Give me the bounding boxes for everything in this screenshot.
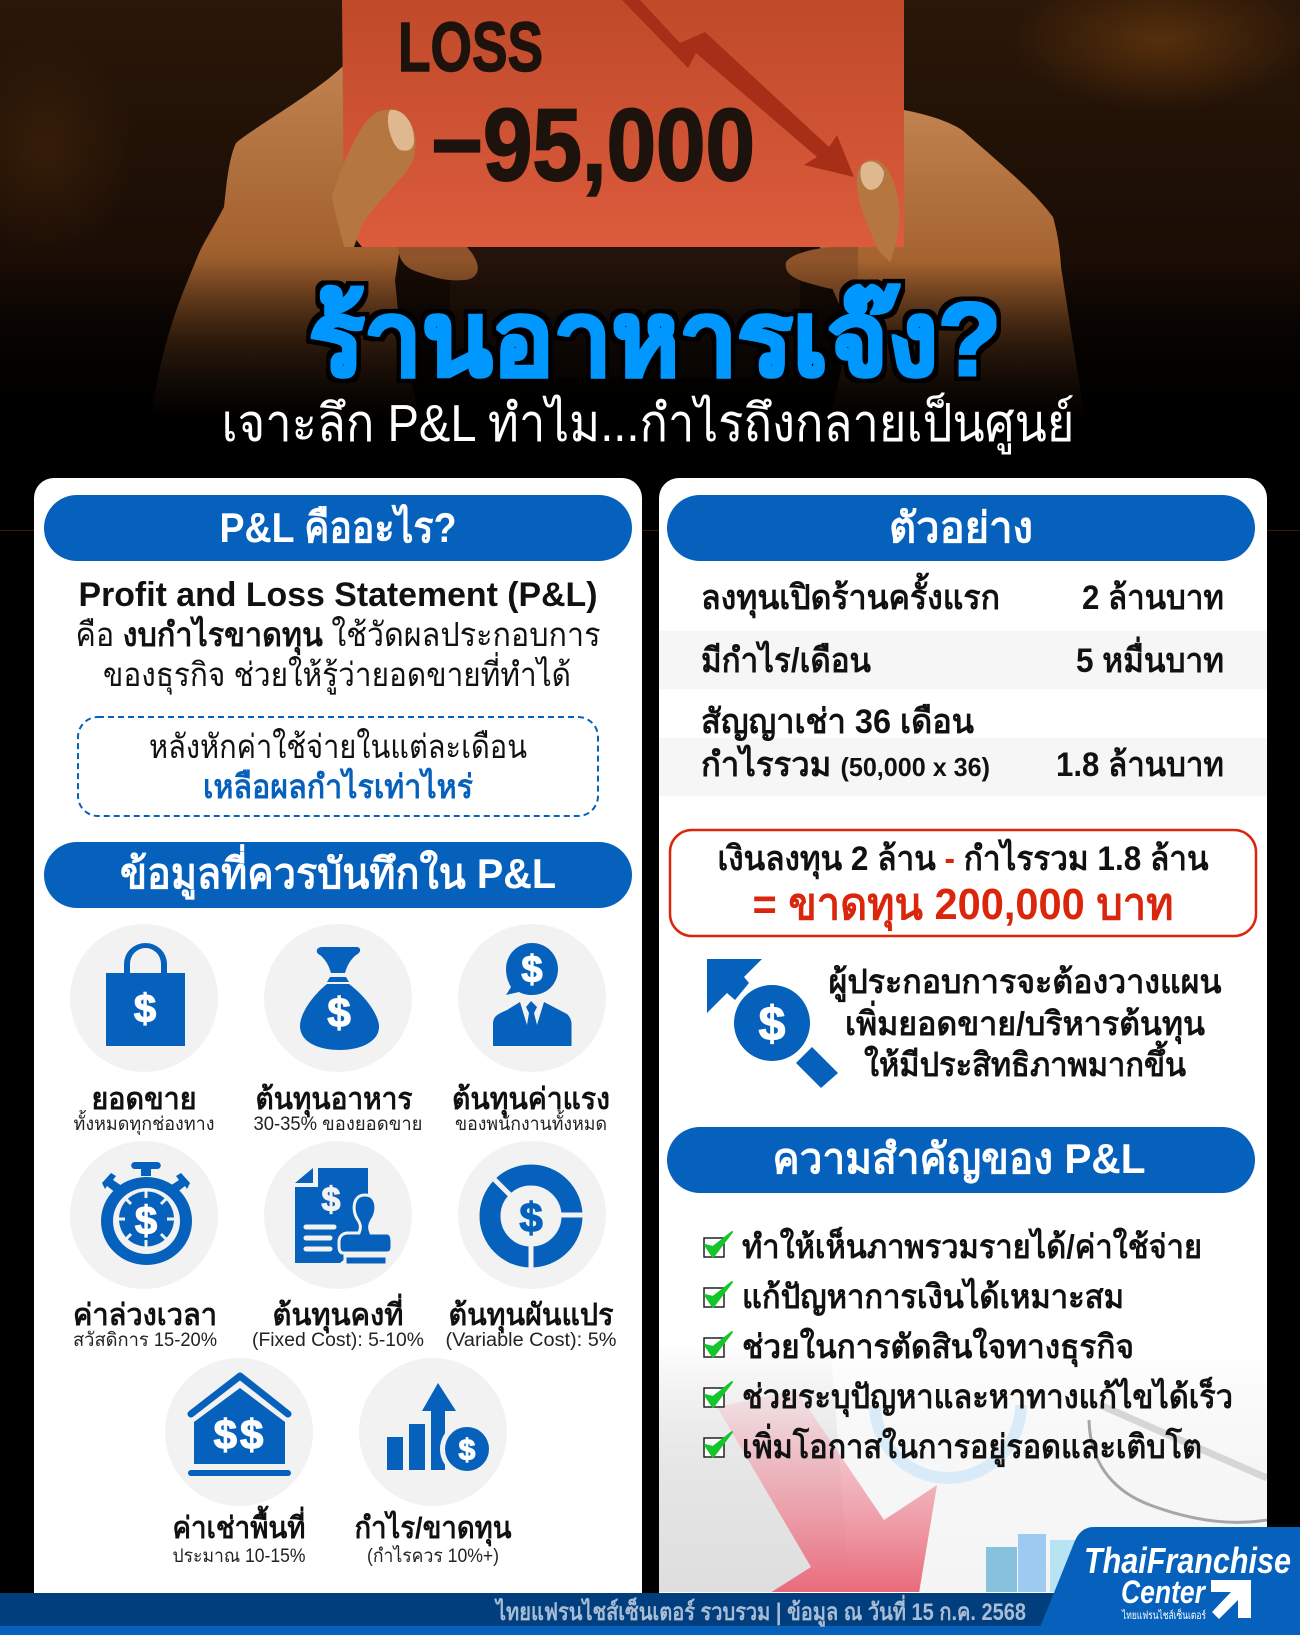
logo: ThaiFranchise Center: [1037, 1527, 1300, 1635]
footer bar: ไทยแฟรนไชส์เซ็นเตอร์ รวบรวม | ข้อมูล ณ วันที่ 15 ก.ค. 2568: [493, 1594, 1026, 1627]
item: food cost: ต้นทุนอาหาร: [256, 1083, 412, 1118]
planning text: ผู้ประกอบการจะต้องวางแผน: [828, 963, 1222, 1003]
logo arrow: [1211, 1580, 1251, 1619]
item: rent: [165, 1358, 313, 1567]
item: profit or loss: (กำไรควร 10%+): [367, 1545, 499, 1567]
item: food cost: [254, 924, 422, 1135]
hero photo: hands holding a loss paper: [0, 0, 1300, 478]
heading: data to record: [44, 842, 632, 908]
item: variable cost: (Variable Cost): 5%: [446, 1330, 617, 1351]
wood shadow under the paper: [450, 247, 800, 377]
item: fixed cost: ต้นทุนคงที่: [272, 1293, 404, 1334]
dark fade: [0, 260, 1300, 420]
item: variable cost: [446, 1141, 617, 1351]
icon: magnifier and arrow: $: [759, 998, 786, 1051]
loss label: LOSS: [398, 8, 543, 86]
result box: เงินลงทุน 2 ล้าน - กำไรรวม 1.8 ล้าน: [718, 838, 1208, 880]
panel: right: [659, 478, 1267, 1618]
heading: what is P&L: P&L คืออะไร?: [220, 503, 456, 551]
planning text: ให้มีประสิทธิภาพมากขึ้น: [864, 1040, 1186, 1083]
check item 2: แก้ปัญหาการเงินได้เหมาะสม: [742, 1277, 1124, 1316]
footer bar: [0, 1593, 1300, 1635]
heading: example: [667, 495, 1255, 561]
item: fixed cost: $: [322, 1181, 341, 1219]
item: fixed cost: (Fixed Cost): 5-10%: [252, 1330, 424, 1351]
icon: magnifier and arrow: [707, 959, 838, 1088]
heading: importance: [667, 1127, 1255, 1193]
heading: example: ตัวอย่าง: [889, 504, 1033, 551]
item: food cost: 30-35% ของยอดขาย: [254, 1114, 422, 1135]
item: overtime: ค่าล่วงเวลา: [73, 1299, 217, 1332]
result box: [670, 830, 1256, 936]
heading: data to record: ข้อมูลที่ควรบันทึกใน P&L: [120, 844, 556, 900]
item: overtime: $: [135, 1199, 157, 1243]
item: profit or loss: [354, 1358, 512, 1567]
loss amount: −95,000: [431, 88, 755, 202]
item: rent: ค่าเช่าพื้นที่: [172, 1505, 306, 1545]
example table: กำไรรวม (50,000 x 36): [701, 744, 990, 784]
red paper: [342, 0, 904, 247]
logo: ThaiFranchise Center: Center: [1121, 1574, 1206, 1610]
faded chart photo background: [659, 1369, 1267, 1592]
item: profit or loss: $: [459, 1434, 476, 1467]
definition text: Profit and Loss Statement (P&L): [78, 576, 598, 614]
item: fixed cost: [252, 1141, 424, 1351]
item: labour cost: $: [521, 949, 543, 991]
definition text: [76, 576, 600, 695]
check item 5: เพิ่มโอกาสในการอยู่รอดและเติบโต: [742, 1423, 1202, 1468]
heading: what is P&L: [44, 495, 632, 561]
item: variable cost: $: [519, 1194, 543, 1241]
item: rent: $$: [214, 1411, 266, 1458]
item: labour cost: ของพนักงานทั้งหมด: [455, 1110, 607, 1135]
panel: left: [34, 478, 642, 1618]
definition text: ของธุรกิจ ช่วยให้รู้ว่ายอดขายที่ทำได้: [103, 652, 571, 695]
checklist: [704, 1226, 1233, 1468]
example table: มีกำไร/เดือน: [701, 640, 871, 680]
planning text: [828, 963, 1222, 1083]
down arrow: [622, 0, 854, 177]
item: rent: ประมาณ 10-15%: [172, 1546, 306, 1567]
definition text: คือ งบกำไรขาดทุน ใช้วัดผลประกอบการ: [76, 615, 600, 656]
result box: = ขาดทุน 200,000 บาท: [752, 880, 1174, 932]
dashed callout: เหลือผลกำไรเท่าไหร่: [203, 767, 473, 805]
title: ร้านอาหารเจ๊ง?: [309, 282, 1001, 398]
item: sales: [70, 924, 218, 1136]
heading: importance: ความสำคัญของ P&L: [772, 1135, 1146, 1184]
item: profit or loss: กำไร/ขาดทุน: [354, 1510, 512, 1547]
example table: ลงทุนเปิดร้านครั้งแรก: [701, 572, 1000, 619]
item: overtime: [70, 1141, 218, 1351]
example table: 2 ล้านบาท: [1082, 579, 1224, 617]
example table: 5 หมื่นบาท: [1076, 636, 1224, 680]
dashed callout: [78, 717, 598, 816]
planning text: เพิ่มยอดขาย/บริหารต้นทุน: [845, 1000, 1205, 1045]
example table: [659, 572, 1267, 796]
item: sales: ยอดขาย: [92, 1083, 196, 1116]
item: sales: ทั้งหมดทุกช่องทาง: [74, 1110, 214, 1136]
dashed callout: หลังหักค่าใช้จ่ายในแต่ละเดือน: [149, 728, 527, 765]
left hand: [150, 65, 420, 420]
check item 1: ทำให้เห็นภาพรวมรายได้/ค่าใช้จ่าย: [742, 1226, 1202, 1265]
check item 4: ช่วยระบุปัญหาและหาทางแก้ไขได้เร็ว: [742, 1376, 1233, 1418]
item: overtime: สวัสดิการ 15-20%: [73, 1330, 217, 1351]
item: variable cost: ต้นทุนผันแปร: [448, 1299, 614, 1334]
item: labour cost: ต้นทุนค่าแรง: [452, 1083, 610, 1118]
example table: สัญญาเช่า 36 เดือน: [701, 703, 974, 742]
item: sales: $: [134, 987, 156, 1031]
example table: 1.8 ล้านบาท: [1056, 746, 1224, 784]
logo: ThaiFranchise Center: ไทยแฟรนไชส์เซ็นเตอร์: [1121, 1608, 1206, 1622]
fingers under the paper: [398, 245, 858, 291]
subtitle: เจาะลึก P&L ทำไม...กำไรถึงกลายเป็นศูนย์: [222, 393, 1074, 455]
thumbs: [332, 110, 416, 247]
item: labour cost: [452, 924, 610, 1135]
right hand: [820, 110, 1085, 420]
check item 3: ช่วยในการตัดสินใจทางธุรกิจ: [742, 1327, 1134, 1368]
item: food cost: $: [327, 989, 351, 1036]
